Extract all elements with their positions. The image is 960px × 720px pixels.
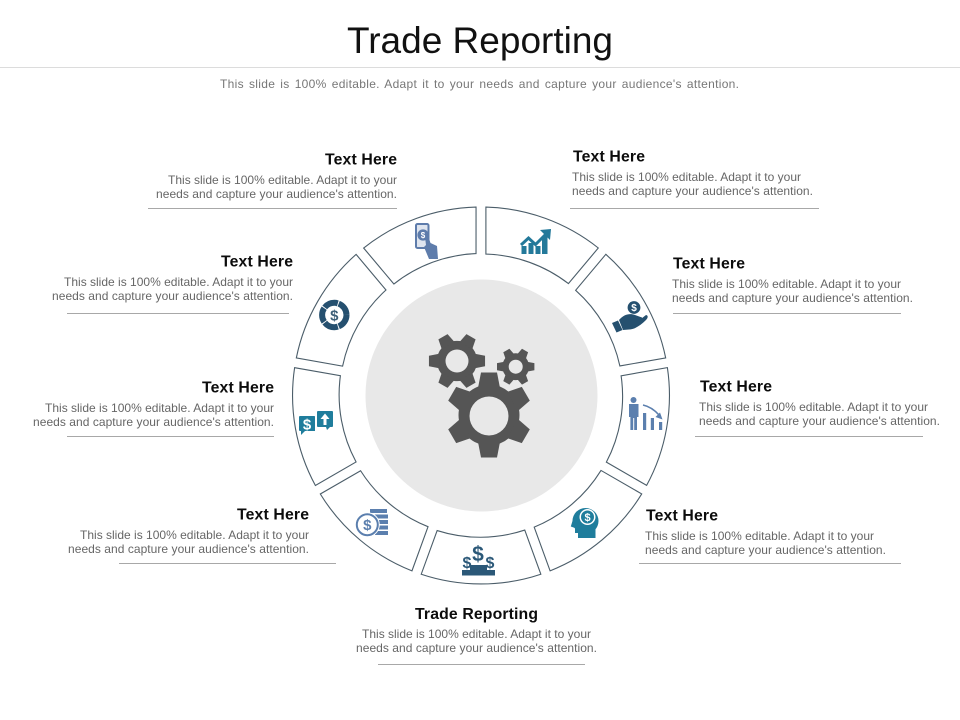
text block: left middle	[33, 380, 274, 436]
text block: left middle: Text Here	[202, 380, 274, 396]
text block: right lower: This slide is 100% editable. Adapt it to your	[645, 529, 874, 543]
subtitle: This slide is 100% editable. Adapt it to your needs and capture your audience's attention.	[220, 77, 739, 91]
text block: left lower	[68, 506, 336, 564]
text block: top right: This slide is 100% editable. Adapt it to your	[572, 170, 801, 184]
ring segment 8	[296, 247, 391, 371]
ring segment 7	[259, 350, 382, 485]
icon: dollar ring	[322, 303, 346, 327]
text block: top left: Text Here	[325, 152, 397, 168]
icon: growth chart	[521, 229, 551, 254]
text block: top right	[570, 148, 819, 208]
icon: head with dollar: $	[584, 512, 591, 524]
icon: dollars on podium: $	[486, 555, 495, 572]
text block: top left	[148, 152, 397, 208]
text block: right upper: This slide is 100% editable. Adapt it to your	[672, 277, 901, 291]
text block: left upper	[52, 254, 293, 314]
text block: left upper: This slide is 100% editable. Adapt it to your	[64, 275, 293, 289]
ring segment 3	[592, 368, 687, 492]
text block: left middle: This slide is 100% editable. Adapt it to your	[45, 401, 274, 415]
text block: right lower: needs and capture your audience's attention.	[645, 543, 886, 557]
text block: bottom: Trade Reporting	[415, 606, 538, 623]
text block: bottom: This slide is 100% editable. Adapt it to your	[362, 627, 591, 641]
icon: gears	[419, 323, 541, 458]
text block: right middle: needs and capture your audience's attention.	[699, 414, 940, 428]
text block: right upper: Text Here	[673, 256, 745, 272]
text block: left lower: This slide is 100% editable. Adapt it to your	[80, 528, 309, 542]
center circle	[366, 280, 598, 512]
ring segment 2	[557, 254, 692, 385]
icon: phone and hand: $	[421, 231, 426, 240]
text block: right middle: This slide is 100% editable. Adapt it to your	[699, 400, 928, 414]
ring segment 4	[519, 456, 642, 591]
text block: right middle	[695, 378, 940, 436]
icon: hand holding coin: $	[631, 303, 637, 314]
icon: phone and hand	[416, 224, 438, 259]
icon: dollars on podium: $	[472, 543, 484, 566]
icon: dollars on podium: $	[463, 555, 472, 572]
text block: top right: Text Here	[573, 148, 645, 166]
icon: person with falling bars	[629, 397, 662, 430]
text block: left lower: needs and capture your audience's attention.	[68, 542, 309, 556]
icon: speech bubbles	[299, 411, 333, 435]
text block: left middle: needs and capture your audience's attention.	[33, 415, 274, 429]
text block: right lower: Text Here	[646, 508, 718, 524]
text block: right lower	[639, 508, 901, 564]
icon: speech bubbles: $	[303, 416, 312, 434]
text block: bottom: needs and capture your audience's attention.	[356, 641, 597, 655]
icon: coin with stack	[355, 509, 388, 537]
text block: top left: This slide is 100% editable. Adapt it to your	[168, 173, 397, 187]
icon: dollars on podium	[462, 543, 495, 576]
text block: right upper	[672, 256, 913, 314]
text block: bottom	[356, 606, 597, 664]
text block: right upper: needs and capture your audience's attention.	[672, 291, 913, 305]
ring segment 6	[306, 461, 438, 571]
title: Trade Reporting	[347, 20, 613, 61]
text block: left lower: Text Here	[237, 506, 309, 524]
text block: left upper: needs and capture your audience's attention.	[52, 289, 293, 303]
ring segment 1	[486, 207, 598, 284]
text block: top left: needs and capture your audience's attention.	[156, 187, 397, 201]
text block: top right: needs and capture your audience's attention.	[572, 184, 813, 198]
ring segment 5	[409, 502, 541, 613]
icon: coin with stack: $	[363, 517, 372, 534]
icon: dollar ring: $	[330, 308, 339, 324]
icon: hand holding coin	[612, 301, 648, 332]
icon: head with dollar	[571, 508, 598, 538]
ring segment 9	[364, 176, 499, 307]
text block: right middle: Text Here	[700, 378, 772, 396]
text block: left upper: Text Here	[221, 254, 293, 270]
